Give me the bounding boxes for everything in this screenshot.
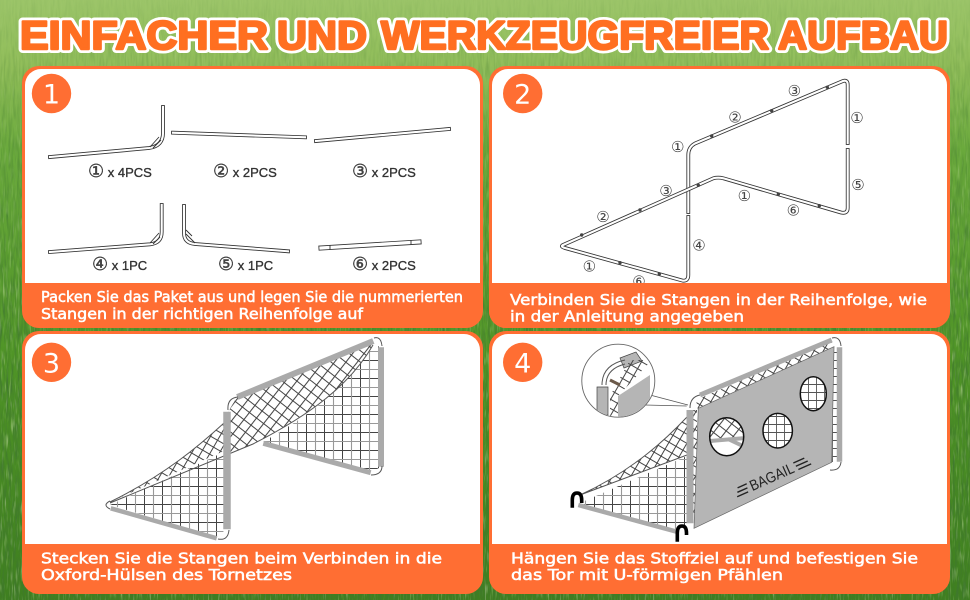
rod 3 [316,129,449,141]
title: WERKZEUGFREIER [381,14,769,58]
step 1 badge [32,74,71,113]
caption 4: Hängen Sie das Stoffziel auf und befestigen Sie [511,550,918,568]
panel: step 4 [489,331,950,594]
assembled frame [562,81,848,281]
title: AUFBAU [778,14,948,58]
label 3: ③ x 2PCS [352,161,416,182]
part numbers: ⑥ [632,272,646,290]
panel: step 1 [22,66,483,328]
panel: step 3 [22,331,483,594]
title: UND [277,14,367,58]
brand logo [732,453,813,501]
part numbers: ① [738,187,751,205]
caption 1: Packen Sie das Paket aus und legen Sie die nummerierten [41,288,463,306]
caption 2: in der Anleitung angegeben [510,308,744,326]
part numbers: ③ [788,82,801,100]
label 5: ⑤ x 1PC [218,254,273,275]
title [20,14,948,58]
caption 3: Oxford-Hülsen des Tornetzes [41,566,292,584]
step 3 badge [32,343,71,382]
title: EINFACHER [20,14,268,58]
leader lines [645,395,688,406]
part numbers: ⑤ [851,176,865,194]
part numbers: ② [596,208,610,226]
sleeves [237,341,373,397]
part numbers: ④ [692,236,706,254]
corners [106,338,382,539]
part numbers: ① [671,138,684,156]
caption 3 [41,550,442,584]
rod 6 [321,240,419,250]
label 6: ⑥ x 2PCS [352,254,416,275]
rod 4 [50,205,162,252]
u-stake left [572,493,582,508]
title: EINFACHER [20,14,268,58]
rod 5 [184,206,288,251]
part numbers [583,82,865,290]
step 4 badge [503,343,542,382]
caption 1: Stangen in der richtigen Reihenfolge auf [41,305,364,323]
step 4 badge: 4 [514,348,531,379]
rod 1 [50,107,163,157]
step 3 badge: 3 [43,348,60,379]
caption 4 [511,550,918,584]
front left sleeve [686,410,694,523]
panel: step 2 [489,66,950,328]
step 2 badge: 2 [514,80,531,110]
title: AUFBAU [778,14,948,58]
part numbers: ⑥ [787,202,800,220]
caption 4: das Tor mit U-förmigen Pfählen [511,566,783,584]
target hole middle [763,413,792,448]
title: WERKZEUGFREIER [381,14,769,58]
part numbers: ③ [659,182,673,200]
step 1 badge: 1 [43,80,60,110]
caption 2 [510,291,927,326]
rod 2 [173,133,305,137]
detail inset [582,344,655,420]
caption 2: Verbinden Sie die Stangen in der Reihenfolge, wie [510,291,927,309]
part numbers: ① [850,109,864,127]
title: UND [277,14,367,58]
label 4: ④ x 1PC [92,254,147,275]
u-stake right [677,526,686,542]
caption band 2 [489,283,950,328]
label 1: ① x 4PCS [88,161,152,182]
part numbers: ② [728,108,742,126]
goal net side [578,338,841,532]
caption 3: Stecken Sie die Stangen beim Verbinden in die [41,550,442,568]
target hole left [708,417,744,456]
target sheet [694,347,834,528]
target hole right [800,377,826,411]
brand logo: BAGAIL [747,460,797,495]
label 2: ② x 2PCS [213,161,277,182]
caption 1 [41,288,463,323]
step 2 badge [503,74,542,113]
part numbers: ① [583,258,596,276]
goal with net [106,338,382,539]
